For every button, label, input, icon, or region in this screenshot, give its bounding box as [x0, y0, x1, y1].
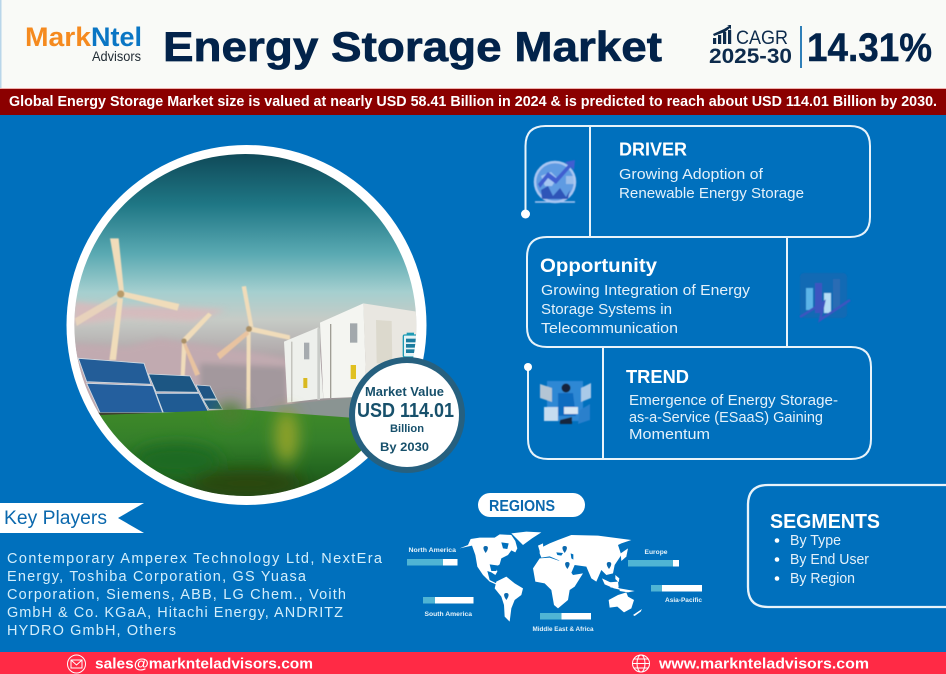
opportunity text: Telecommunication: [541, 320, 678, 337]
solar panels: [78, 358, 223, 413]
segment list: By Region: [790, 571, 855, 587]
clouds: [73, 302, 293, 413]
panel: trend: [524, 347, 871, 459]
summary bar: [0, 89, 946, 115]
driver text: Renewable Energy Storage: [619, 185, 804, 202]
market value badge: USD 114.01: [357, 400, 454, 422]
CAGR divider: [800, 26, 802, 68]
key players list: [7, 551, 383, 639]
panel: opportunity: [527, 237, 850, 347]
trend text: TREND: [626, 367, 689, 387]
icon: mail: [68, 655, 86, 673]
key players list: Contemporary Amperex Technology Ltd, NextEra: [7, 551, 383, 567]
icon: globe with growth arrow: [535, 160, 575, 202]
key players ribbon: [0, 503, 144, 533]
region: Europe: Europe: [644, 549, 668, 556]
market value badge: By 2030: [380, 440, 429, 454]
region bars and labels: [407, 547, 703, 633]
regions pill: [478, 493, 585, 517]
driver text: Growing Adoption of: [619, 166, 764, 183]
trend text: as-a-Service (ESaaS) Gaining: [629, 410, 823, 426]
CAGR label: 2025-30: [709, 45, 792, 68]
turbines: [75, 238, 290, 409]
key players list: Energy, Toshiba Corporation, GS Yuasa: [7, 569, 307, 585]
website: www.marknteladvisors.com: [658, 656, 869, 672]
opportunity text: Growing Integration of Energy: [541, 282, 751, 299]
CAGR label: CAGR: [736, 28, 788, 49]
header band: [0, 0, 946, 89]
region: South America: [423, 597, 474, 618]
market value badge: Market Value: [365, 384, 444, 399]
driver text: [619, 140, 804, 202]
driver text: DRIVER: [619, 140, 687, 160]
region: North America: North America: [408, 547, 457, 554]
logo: MarkNtel Advisors: Advisors: [92, 48, 141, 64]
opportunity text: [540, 256, 751, 337]
key players list: GmbH & Co. KGaA, Hitachi Energy, ANDRITZ: [7, 605, 343, 621]
icon: bar chart with arrow: [800, 273, 850, 320]
region: Asia-Pacific: Asia-Pacific: [665, 597, 703, 604]
icon: globe: [632, 655, 650, 672]
trend text: [626, 367, 838, 443]
email: sales@marknteladvisors.com: [95, 656, 313, 672]
hero photo circle: [66, 145, 426, 505]
segment list: [775, 533, 869, 587]
battery icon on container: [403, 333, 418, 357]
segment list: By Type: [790, 533, 841, 549]
summary bar: Global Energy Storage Market size is valued at nearly USD 58.41 Billion in 2024 & is predicted to reach about USD 114.01 Billion by 2030.: [9, 94, 937, 110]
opportunity text: Storage Systems in: [541, 301, 672, 318]
logo: MarkNtel Advisors: [25, 22, 142, 64]
region: Middle East & Africa: Middle East & Africa: [532, 626, 594, 633]
CAGR label: [709, 28, 792, 68]
map pins: [483, 546, 611, 600]
photo: wind turbines, solar panels and battery containers: [74, 154, 416, 496]
key players ribbon: Key Players: [4, 508, 107, 529]
icon: person with dashboards: [540, 381, 591, 424]
world map: [460, 532, 642, 622]
trend text: Emergence of Energy Storage-: [629, 393, 838, 409]
trend text: Momentum: [629, 427, 710, 443]
region: North America: [407, 547, 458, 566]
logo: MarkNtel Advisors: Ntel: [91, 22, 142, 52]
icon: CAGR growth chart: [713, 25, 731, 44]
CAGR value: 14.31%: [807, 26, 932, 70]
segment list: By End User: [790, 552, 869, 568]
market value badge: [349, 357, 465, 473]
opportunity text: Opportunity: [540, 256, 657, 277]
region: Asia-Pacific: [651, 585, 703, 604]
panel: segments: SEGMENTS: [770, 511, 880, 533]
panel: segments: [748, 485, 946, 607]
region: South America: South America: [424, 611, 473, 618]
key players list: Corporation, Siemens, ABB, LG Chem., Voith: [7, 587, 346, 603]
region: Middle East & Africa: [532, 613, 594, 633]
panel: driver: [521, 126, 870, 237]
title: Energy Storage Market: [163, 23, 662, 70]
battery containers: [284, 327, 323, 403]
key players list: HYDRO GmbH, Others: [7, 623, 176, 639]
region: Europe: [628, 549, 679, 566]
inland seas: [490, 542, 573, 571]
regions pill: REGIONS: [489, 498, 555, 515]
footer band: [0, 652, 946, 674]
market value badge: Billion: [390, 423, 424, 435]
ground and grass: [242, 398, 352, 416]
logo: MarkNtel Advisors: Mark: [25, 22, 92, 52]
